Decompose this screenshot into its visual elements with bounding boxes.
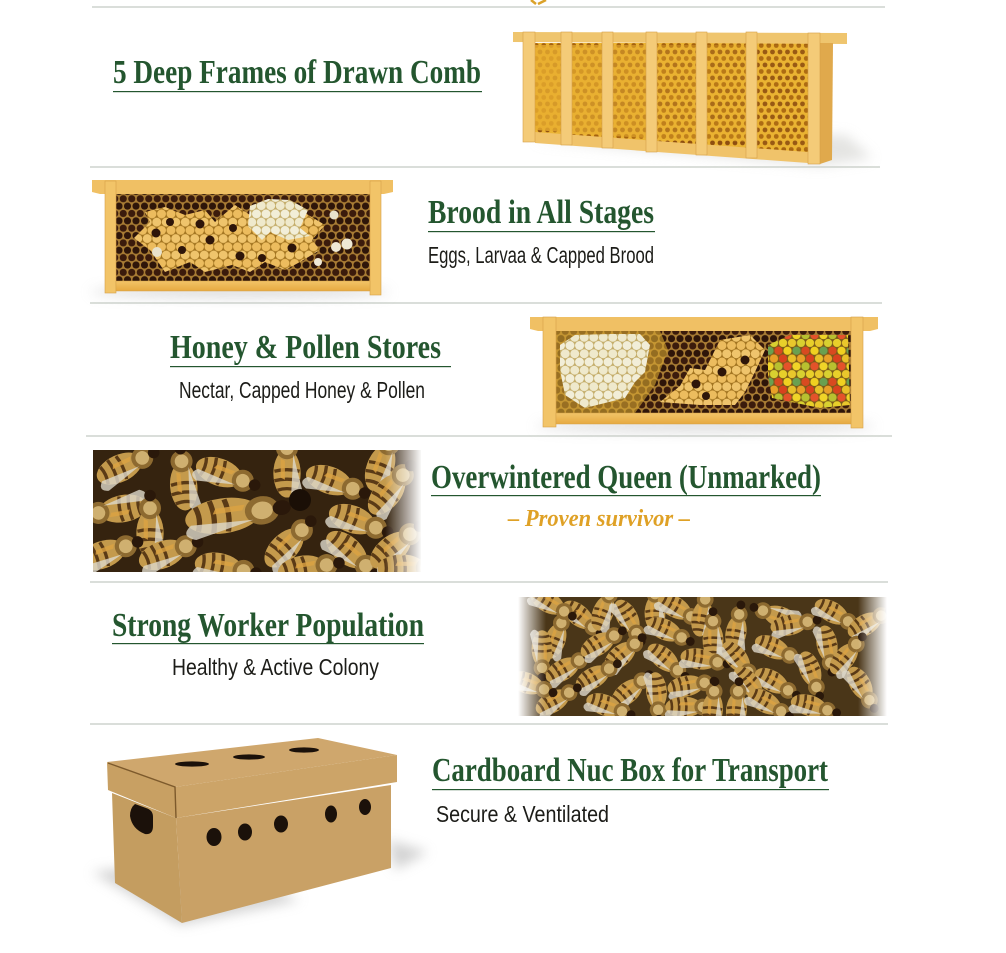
subtext: eggs, larvaa and capped brood: Eggs, Larvaa & Capped Brood <box>428 242 654 268</box>
panel: honey and pollen <box>170 317 878 432</box>
illustration: cardboard nuc box <box>92 738 428 925</box>
panel: 5 deep frames <box>113 32 872 166</box>
heading: honey and pollen stores: Honey & Pollen Stores <box>170 329 441 366</box>
panel: worker population <box>112 597 886 716</box>
heading: cardboard nuc box for transport: Cardboard Nuc Box for Transport <box>432 752 829 789</box>
photo: queen among bees <box>93 450 420 572</box>
panel: nuc box <box>92 738 829 925</box>
heading: 5 deep frames: 5 Deep Frames of Drawn Comb <box>113 54 481 91</box>
illustration: honey and pollen frame <box>530 317 878 432</box>
illustration: five deep frames of comb <box>513 32 872 166</box>
panel: brood <box>90 180 655 298</box>
top title fragment <box>531 0 546 4</box>
panel: overwintered queen <box>93 450 821 572</box>
subtext: healthy and active colony: Healthy & Active Colony <box>172 654 379 680</box>
heading: overwintered queen: Overwintered Queen (Unmarked) <box>431 459 821 496</box>
subtext: nectar, capped honey and pollen: Nectar, Capped Honey & Pollen <box>179 377 425 403</box>
illustration: brood frame <box>90 180 393 298</box>
subtext: proven survivor: – Proven survivor – <box>507 506 690 532</box>
heading: strong worker population: Strong Worker Population <box>112 607 424 644</box>
subtext: secure and ventilated: Secure & Ventilated <box>436 801 609 827</box>
heading: brood in all stages: Brood in All Stages <box>428 194 654 231</box>
photo: worker bees <box>519 597 886 716</box>
